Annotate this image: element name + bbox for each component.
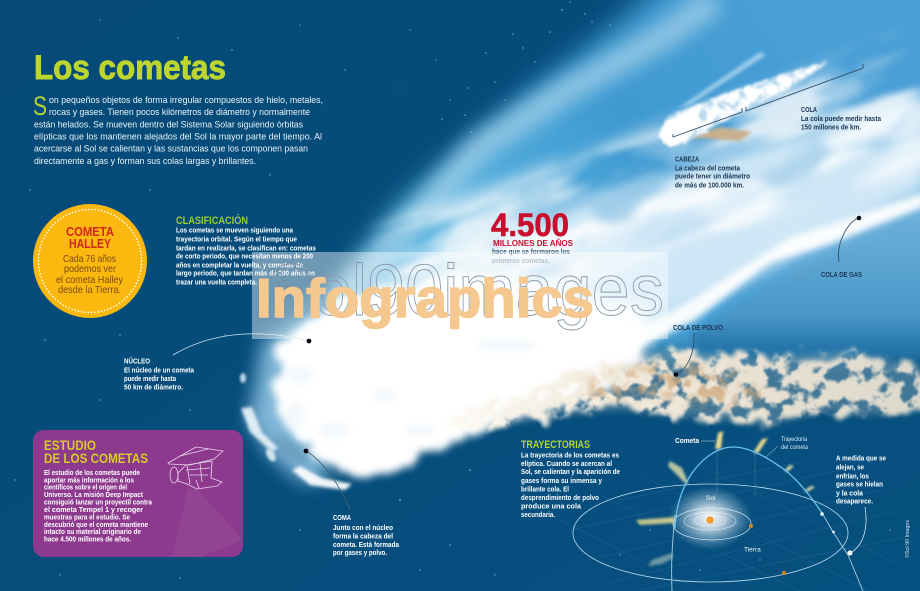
- text block: trayectorias: TRAYECTORIAS: [521, 439, 590, 451]
- orbital plane grid: [560, 462, 915, 591]
- label: cola de polvo: [673, 323, 723, 377]
- panel heading: [44, 438, 148, 466]
- watermark: [252, 251, 668, 339]
- label: tierra: Tierra: [744, 546, 761, 554]
- outer orbit: [573, 484, 848, 582]
- note: a medida: [836, 454, 886, 506]
- coma pale mottling: [285, 366, 436, 438]
- text block: trayectorias: produce una cola: [521, 502, 582, 510]
- small comet thin tail: [678, 52, 766, 108]
- pale band along the sky edge: [340, 0, 715, 300]
- panel text: muestras para el estudio. Se: [44, 512, 130, 522]
- text block: trayectorias: elíptica. Cuando se acercan al: [521, 459, 612, 468]
- small comet dust: [678, 127, 752, 141]
- label: coma: por gases y polvo.: [333, 548, 387, 557]
- label: cola: [801, 105, 882, 132]
- label: núcleo: 50 km de diámetro.: [124, 382, 183, 392]
- badge: cometa Halley: HALLEY: [69, 236, 111, 251]
- label: cola: La cola puede medir hasta: [801, 114, 882, 123]
- note: a medida: y la cola: [836, 488, 864, 498]
- text block: clasificación: [176, 214, 316, 286]
- scale bracket: [673, 64, 863, 137]
- label: cabeza: La cabeza del cometa: [675, 164, 741, 172]
- inner orbits: [673, 508, 751, 540]
- badge: cometa Halley: COMETA: [66, 224, 115, 239]
- text block: trayectorias: secundaria.: [521, 510, 555, 519]
- intro text: rocas y gases. Tienen pocos kilómetros de diámetro y normalmente: [49, 106, 310, 117]
- panel text: aportar más información a los: [44, 476, 134, 484]
- callout: 4.500 millones de años: MILLONES DE AÑOS: [493, 238, 573, 248]
- text block: clasificación: tardan en realizarla, se clasifican en: cometas: [176, 244, 316, 252]
- planets: [749, 524, 753, 528]
- intro text: on pequeños objetos de forma irregular compuestos de hielo, metales,: [49, 94, 323, 105]
- label: cola de gas: COLA DE GAS: [821, 270, 862, 279]
- gas tail veil: [400, 100, 920, 350]
- panel text: consiguió lanzar un proyectil contra: [44, 498, 153, 506]
- badge: cometa Halley: [33, 204, 147, 318]
- panel: estudio de los cometas: [33, 430, 243, 557]
- label: cabeza: puede tener un diámetro: [675, 172, 750, 180]
- gas tail blue patches: [443, 53, 920, 301]
- panel text: descubrió que el cometa mantiene: [44, 520, 148, 529]
- bluish shadow in coma: [267, 430, 313, 470]
- badge: cometa Halley: el cometa Halley: [56, 275, 124, 286]
- label: núcleo: NÚCLEO: [124, 356, 150, 366]
- intro text: elípticas que los mantienen alejados del Sol la mayor parte del tiempo. Al: [34, 130, 322, 142]
- label: coma: cometa. Está formada: [333, 540, 400, 549]
- note leader: [850, 507, 866, 553]
- watermark orange text: Infographics: [256, 267, 594, 329]
- watermark outline text: Sol90images: [268, 251, 664, 331]
- dust tail tan core: [590, 362, 775, 405]
- small comet: [659, 52, 863, 147]
- badge: cometa Halley: Cada 76 años: [63, 254, 116, 265]
- stems: [717, 449, 755, 497]
- text block: trayectorias: [521, 439, 620, 519]
- intro text: están helados. Se mueven dentro del Sistema Solar siguiendo órbitas: [34, 118, 303, 130]
- label: núcleo: [124, 334, 311, 392]
- credit: ©Sol 90 Images: [904, 519, 911, 558]
- label: cola: 150 millones de km.: [801, 122, 861, 132]
- note: a medida: gases se hielan: [836, 480, 883, 488]
- label: cometa: Cometa: [675, 438, 699, 445]
- label: trayectoria del cometa: Trayectoria: [781, 437, 808, 443]
- sun glow: [668, 486, 752, 550]
- text block: trayectorias: Sol, se calientan y la aparición de: [521, 467, 620, 476]
- intro text: [33, 91, 323, 166]
- label: sol: Sol: [706, 495, 716, 502]
- label: cometa: [675, 438, 715, 445]
- fading comet dots: [820, 512, 824, 516]
- label: cola de polvo: COLA DE POLVO: [673, 323, 723, 332]
- dust tail: [440, 350, 920, 428]
- sky glow: [270, 0, 920, 400]
- text block: trayectorias: brillante cola. El: [521, 484, 569, 494]
- panel text: el cometa Tempel 1 y recoger: [44, 505, 143, 514]
- panel text: El estudio de los cometas puede: [44, 468, 140, 477]
- panel text: hace 4.500 millones de años.: [44, 534, 131, 544]
- comet path faint: [672, 513, 863, 591]
- text block: clasificación: trazar una vuelta completa.: [176, 278, 257, 286]
- label: cabeza: [675, 154, 750, 190]
- comet tails: [636, 431, 815, 566]
- halo behind coma: [248, 330, 330, 482]
- text block: clasificación: largo periodo, que tardan más de 200 años en: [176, 268, 315, 278]
- panel text: Universo. La misión Deep Impact: [44, 490, 143, 499]
- text block: trayectorias: desprendimiento de polvo: [521, 493, 599, 502]
- icon: Deep Impact probe: [168, 447, 243, 557]
- label: cabeza: CABEZA: [675, 154, 700, 164]
- label: trayectoria del cometa: [765, 437, 809, 458]
- watermark panel: [252, 252, 668, 339]
- drop cap: S: [33, 91, 47, 121]
- title: Los cometas: [34, 49, 226, 87]
- text block: clasificación: trayectoria orbital. Según el tiempo que: [176, 234, 297, 244]
- note: a medida: alejan, se: [836, 462, 864, 472]
- label: cola: COLA: [801, 105, 818, 114]
- panel text: intacto su material originario de: [44, 527, 141, 536]
- label: coma: Junto con el núcleo: [333, 523, 393, 532]
- lower white streak: [600, 192, 920, 355]
- gas tail streaks: [374, 40, 920, 349]
- label: núcleo: El núcleo de un cometa: [124, 366, 195, 374]
- text block: clasificación: de corto periodo, que necesitan menos de 200: [176, 252, 313, 260]
- note: a medida: A medida que se: [836, 454, 886, 462]
- callout: 4.500 millones de años: 4.500: [491, 207, 569, 243]
- panel text: [44, 468, 153, 544]
- callout: 4.500 millones de años: primeros cometas.: [492, 258, 550, 265]
- blue wedge under gas tail: [690, 205, 920, 352]
- panel heading: DE LOS COMETAS: [44, 451, 148, 466]
- label: cola de gas: [821, 216, 862, 279]
- text block: clasificación: años en completar la vuelta, y cometas de: [176, 260, 303, 270]
- panel text: científicos sobre el origen del: [44, 482, 127, 492]
- badge: cometa Halley: desde la Tierra.: [58, 285, 121, 296]
- label: trayectoria del cometa: del cometa: [781, 445, 809, 451]
- main white coma: [276, 275, 640, 478]
- small comet body: [659, 62, 828, 147]
- label: cabeza: de más de 100.000 km.: [675, 180, 744, 190]
- text block: trayectorias: La trayectoria de los cometas es: [521, 450, 619, 460]
- note: a medida: desaparece.: [836, 496, 873, 506]
- text block: clasificación: CLASIFICACIÓN: [176, 214, 248, 227]
- label: coma: [304, 449, 400, 557]
- label: coma: COMA: [333, 513, 352, 522]
- callout: 4.500 millones de años: [491, 207, 573, 265]
- intro text: directamente a gas y forman sus colas largas y brillantes.: [34, 155, 256, 166]
- callout: 4.500 millones de años: hace que se formaron los: [492, 249, 570, 256]
- panel heading: ESTUDIO: [44, 438, 96, 453]
- label: núcleo: puede medir hasta: [124, 374, 177, 383]
- text block: clasificación: Los cometas se mueven siguiendo una: [176, 226, 294, 234]
- badge: cometa Halley: podemos ver: [64, 264, 116, 275]
- diagram: comet orbit: [560, 431, 915, 591]
- note: a medida: enfrían, los: [836, 472, 869, 480]
- intro text: acercarse al Sol se calientan y las sustancias que los componen pasan: [34, 142, 308, 154]
- text block: trayectorias: gases forma su inmensa y: [521, 476, 603, 485]
- label: coma: forma la cabeza del: [333, 532, 393, 540]
- comet illustration: [240, 0, 920, 490]
- sun: [705, 515, 715, 525]
- coma fragments: [241, 407, 278, 452]
- comet path bright: [675, 447, 822, 528]
